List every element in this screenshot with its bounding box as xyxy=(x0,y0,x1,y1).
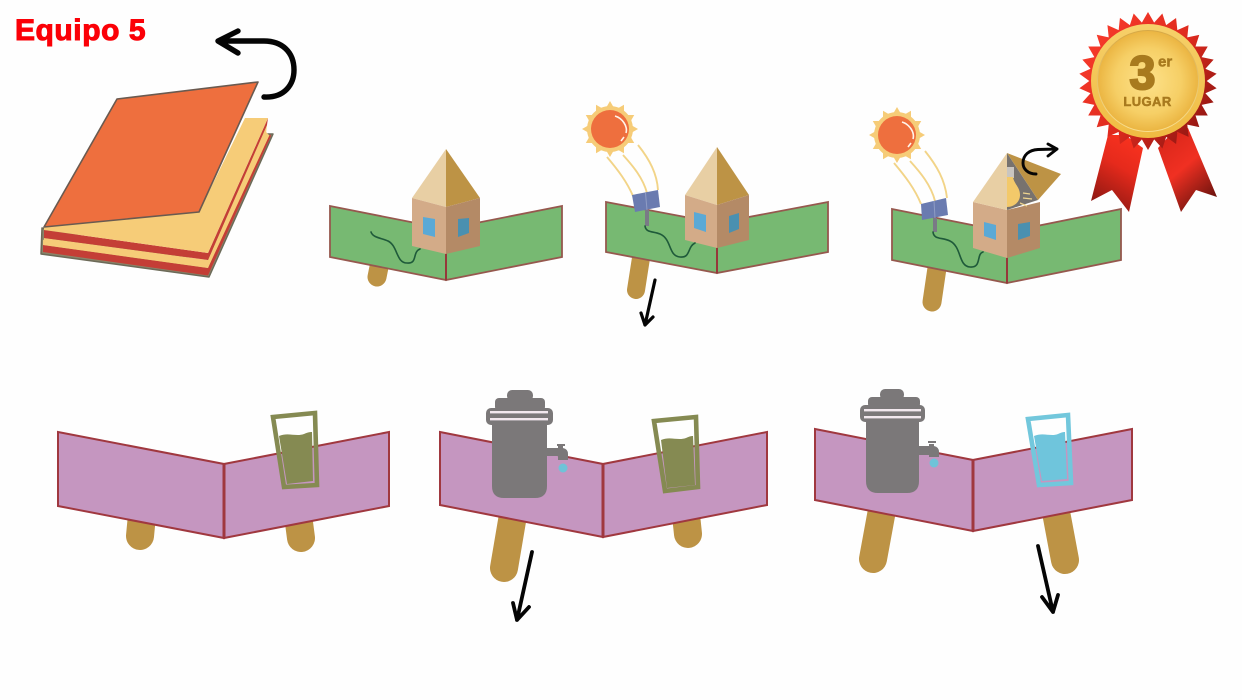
icon: house xyxy=(412,149,480,254)
scene: purple card with dirty glass xyxy=(58,413,389,538)
stick xyxy=(636,258,641,290)
icon: sun xyxy=(582,93,646,157)
icon: folded book xyxy=(41,82,273,277)
gold disc xyxy=(1091,24,1205,138)
wire xyxy=(371,232,420,263)
medal text: 3 xyxy=(1129,46,1156,99)
panel: green card xyxy=(892,209,1121,283)
rosette xyxy=(1078,12,1218,150)
icon: solar panel xyxy=(632,190,660,226)
wire xyxy=(933,232,983,267)
arrow: roof opening xyxy=(1023,144,1057,174)
icon: water filter xyxy=(860,389,939,493)
icon: glass of clean water xyxy=(1028,415,1071,485)
wire xyxy=(645,226,695,257)
icon: house xyxy=(685,147,749,248)
stick xyxy=(932,268,937,302)
scene: house with lamp xyxy=(869,99,1121,302)
medal text: LUGAR xyxy=(1123,94,1172,109)
icon: water filter xyxy=(486,390,568,498)
arrow: down xyxy=(641,280,655,325)
arrow: down xyxy=(1038,546,1058,612)
panel: green card xyxy=(330,206,562,280)
panel: purple card xyxy=(815,429,1132,531)
medal: third place xyxy=(1078,12,1218,212)
panel: purple card xyxy=(58,432,389,538)
scene: purple card with filter and dirty glass xyxy=(440,390,767,620)
icon: sun xyxy=(869,99,933,163)
scene: house with solar panel xyxy=(582,93,828,325)
arrow: down xyxy=(513,552,532,620)
sun beams xyxy=(607,145,658,196)
stick xyxy=(377,262,380,277)
scene: house without panel xyxy=(330,149,562,280)
arrow: page turn xyxy=(218,31,294,97)
icon: glass of dirty water xyxy=(273,413,317,487)
scene: purple card with filter and clean glass xyxy=(815,389,1132,612)
panel: purple card xyxy=(440,432,767,537)
medal text xyxy=(1123,46,1172,109)
ribbons xyxy=(1091,128,1217,212)
medal text: er xyxy=(1158,54,1172,70)
panel: green card xyxy=(606,202,828,273)
sticks xyxy=(504,515,688,568)
icon: solar panel xyxy=(921,198,948,232)
icon: open house with bulb xyxy=(973,153,1061,258)
sun beams xyxy=(894,151,947,204)
sticks xyxy=(873,510,1065,560)
icon: glass of dirty water xyxy=(654,417,698,491)
title: Equipo 5 xyxy=(15,14,146,47)
sticks xyxy=(140,515,301,538)
